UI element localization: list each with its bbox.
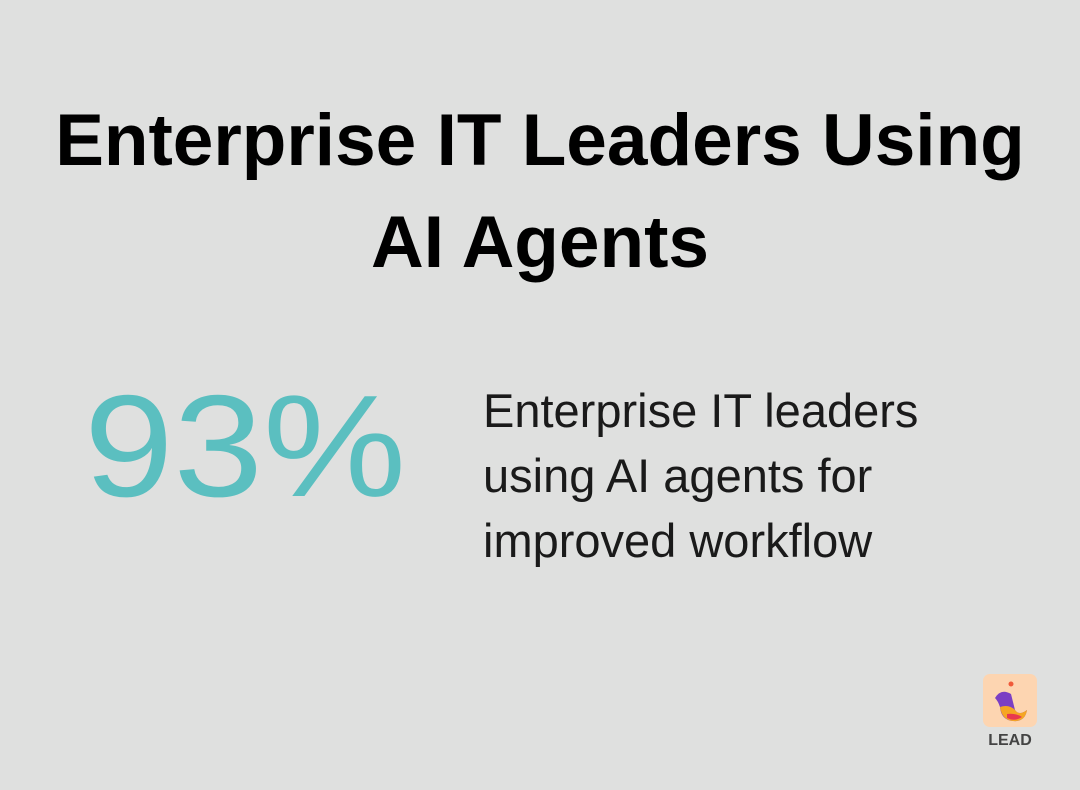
description text: improved workflow: [483, 514, 872, 567]
title: Enterprise IT Leaders Using: [55, 100, 1025, 181]
description text: [483, 384, 918, 567]
logo: [983, 674, 1037, 748]
title: AI Agents: [371, 202, 709, 283]
big statistic: 93%: [84, 365, 406, 527]
description text: using AI agents for: [483, 449, 872, 502]
title: [55, 100, 1025, 283]
description text: Enterprise IT leaders: [483, 384, 918, 437]
